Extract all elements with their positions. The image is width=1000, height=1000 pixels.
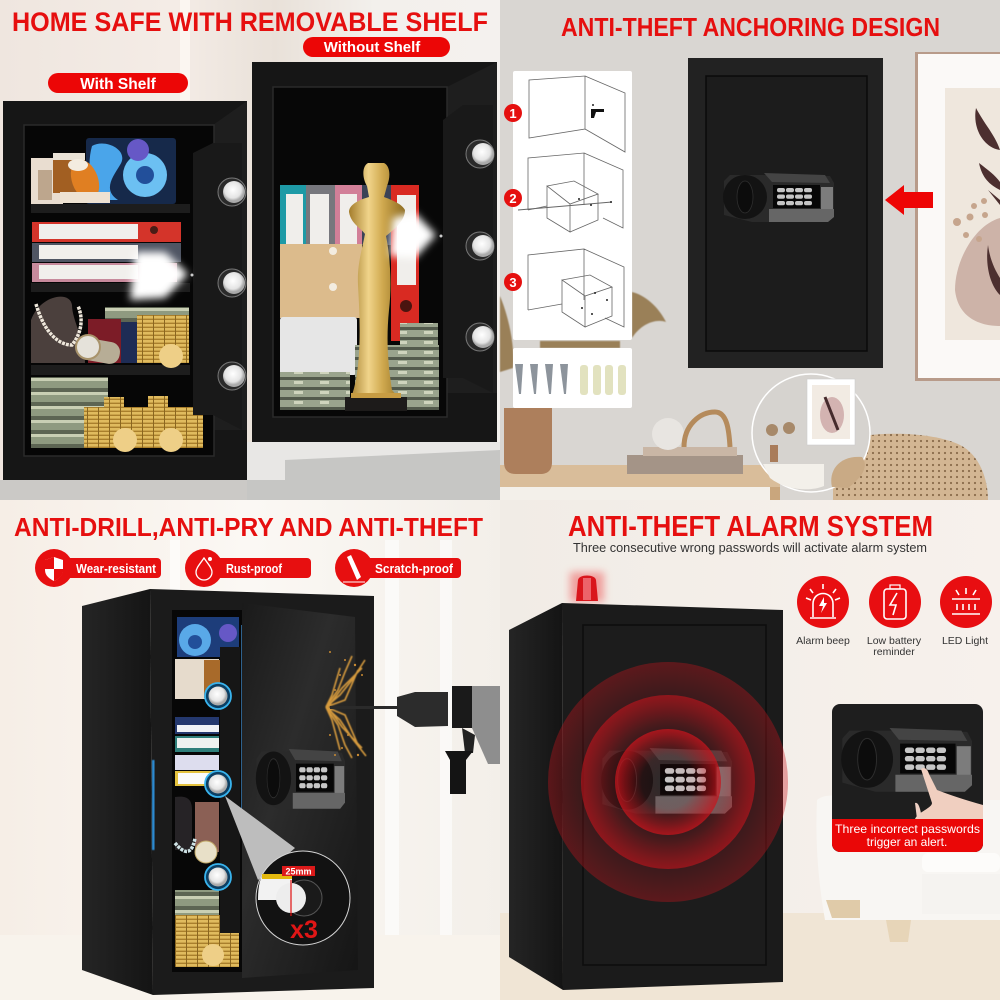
step number 2 <box>504 189 522 207</box>
drill with sparks <box>326 651 500 794</box>
25mm tag: 25mm <box>285 866 312 876</box>
step number 2: 2 <box>509 191 517 206</box>
contents: tablet, bottles, binders, jewellery, coins <box>175 617 239 967</box>
drill glyph <box>591 109 604 118</box>
pill: with shelf: With Shelf <box>80 76 157 93</box>
heading: ANTI-THEFT ALARM SYSTEM <box>568 511 933 543</box>
door <box>242 603 358 978</box>
icon: low battery <box>867 576 922 658</box>
badge: wear-resistant: Wear-resistant <box>76 562 157 576</box>
instruction panel <box>504 71 632 340</box>
open safe <box>82 589 374 995</box>
red caption <box>832 819 983 852</box>
step 3 wall and box <box>528 249 624 327</box>
vase <box>504 408 552 474</box>
shelf boards <box>31 204 190 375</box>
rattan chair <box>833 434 988 500</box>
heading: ANTI-DRILL,ANTI-PRY AND ANTI-THEFT <box>14 514 483 542</box>
heading: HOME SAFE WITH REMOVABLE SHELF <box>12 7 488 37</box>
badge: scratch-proof: Scratch-proof <box>375 562 454 576</box>
panel: home safe with removable shelf <box>0 0 500 500</box>
badge: wear-resistant <box>35 549 161 587</box>
panel: anti-theft alarm system <box>500 500 1000 1000</box>
red caption: Three incorrect passwords <box>835 822 980 836</box>
inset: keypad alert <box>832 704 983 852</box>
door strip <box>443 105 493 393</box>
label line 2: reminder <box>873 646 915 658</box>
step 1 wall <box>529 76 625 152</box>
subheading: Three consecutive wrong passwords will activate alarm system <box>573 541 927 555</box>
locking bolts <box>205 683 231 890</box>
keypad lock <box>723 173 834 222</box>
zoom wedge <box>225 796 295 880</box>
flash light <box>130 252 188 300</box>
badge: scratch-proof <box>335 549 461 587</box>
step number 3 <box>504 273 522 291</box>
decor ball and arc <box>652 412 730 450</box>
alarm beacon <box>570 572 604 602</box>
badge: rust-proof: Rust-proof <box>226 562 283 576</box>
heading: ANTI-THEFT ANCHORING DESIGN <box>561 14 940 42</box>
sound rings <box>548 662 788 902</box>
badge: rust-proof <box>185 549 311 587</box>
panel: anti-theft anchoring design <box>500 0 1000 500</box>
mounting dots <box>578 104 612 315</box>
bolts <box>466 140 494 351</box>
shelf 3: jewellery, passports, watch, money, coins <box>31 297 189 368</box>
step 2 wall and box <box>528 153 623 228</box>
table <box>500 465 780 500</box>
books <box>627 447 743 474</box>
left safe with shelves <box>3 101 247 480</box>
inset room circle <box>752 374 870 492</box>
icon: LED light <box>940 576 992 647</box>
icon: alarm beep <box>796 576 850 647</box>
envelope <box>280 244 362 318</box>
bolts <box>218 178 246 390</box>
label: Low battery <box>867 635 922 647</box>
shelf 2: binders <box>32 222 181 282</box>
binders <box>280 185 419 341</box>
finger <box>915 768 983 819</box>
pill: without shelf <box>303 37 450 57</box>
x3 label: x3 <box>290 916 318 944</box>
keypad lock <box>256 749 345 809</box>
framed botanical art <box>915 52 1000 381</box>
panel: anti-drill, anti-pry and anti-theft <box>0 500 500 1000</box>
door edge strip <box>220 647 240 933</box>
shelf 4: money and coins <box>31 377 203 452</box>
red arrow <box>885 185 933 215</box>
white tablet <box>280 317 357 375</box>
dried pampas decor <box>500 292 666 372</box>
sofa <box>816 796 1000 942</box>
keypad lock <box>601 748 732 814</box>
step number 3: 3 <box>509 275 517 290</box>
label: LED Light <box>942 635 988 647</box>
door strip <box>193 143 242 430</box>
bolt detail circle <box>256 851 350 945</box>
shelf 1: bottles and tablet <box>31 138 176 204</box>
keypad lock <box>841 728 972 792</box>
pill: without shelf: Without Shelf <box>324 39 421 56</box>
step number 1: 1 <box>509 106 517 121</box>
red caption: trigger an alert. <box>867 835 947 849</box>
right safe without shelf <box>252 62 497 442</box>
step number 1 <box>504 104 522 122</box>
screws and anchors panel <box>513 348 632 408</box>
pill: with shelf <box>48 73 188 93</box>
gold statue <box>345 163 407 411</box>
label: Alarm beep <box>796 635 850 647</box>
flash light <box>390 213 436 258</box>
money piles <box>280 323 439 410</box>
wall-mounted safe <box>688 58 883 368</box>
closed safe with alarm rings <box>509 603 788 990</box>
